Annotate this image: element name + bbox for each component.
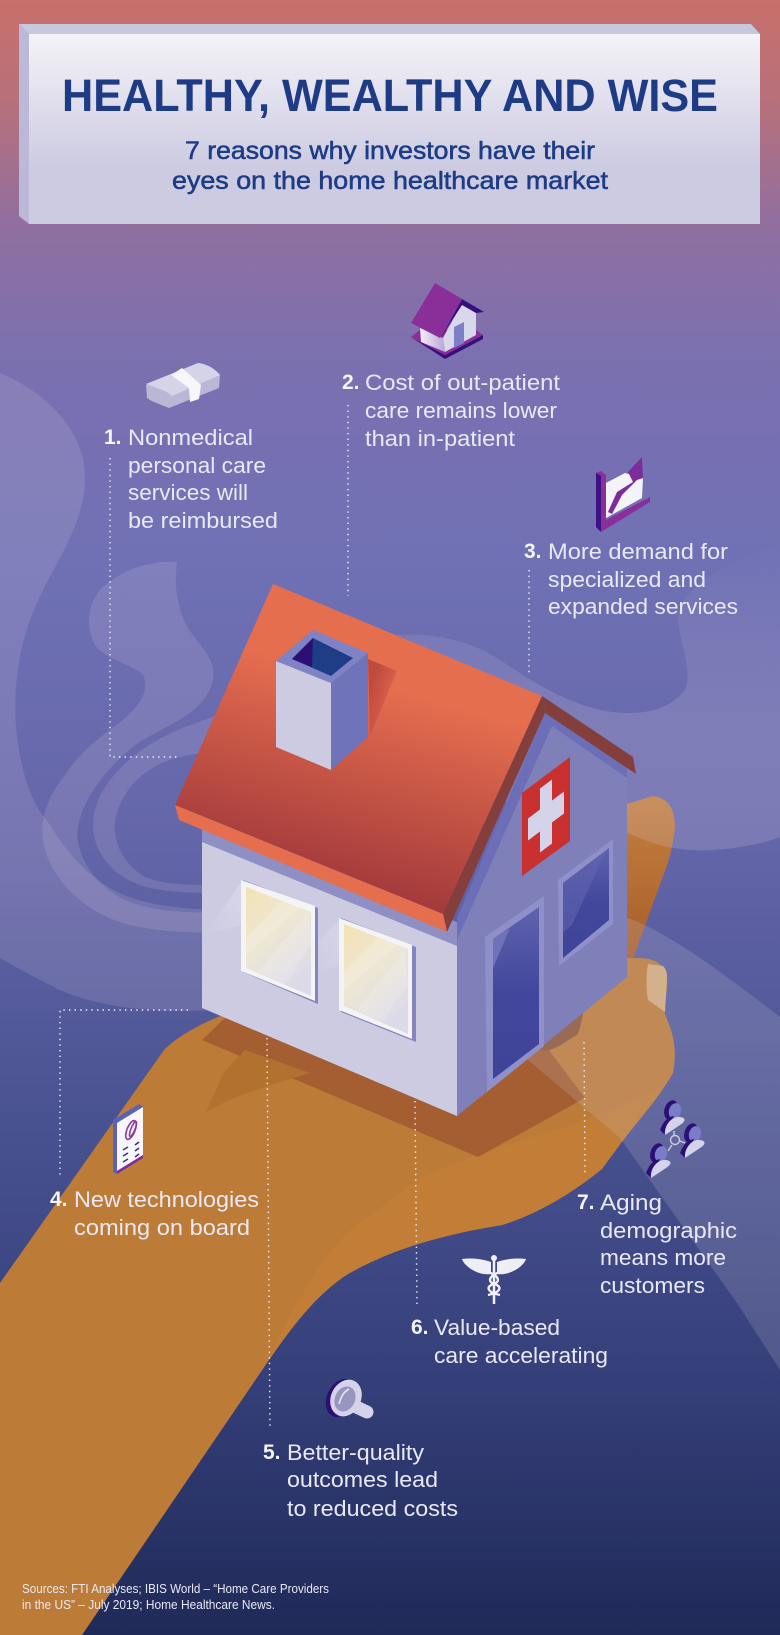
reason 1 text	[104, 425, 278, 533]
sources	[22, 1581, 329, 1612]
icon: people network	[646, 1098, 705, 1178]
reason 4 text: coming on board	[74, 1215, 250, 1240]
reason 7 text	[577, 1190, 737, 1298]
reason 3 text: More demand for	[548, 539, 728, 564]
reason 3 text: specialized and	[548, 567, 706, 592]
hand: upper finger	[600, 796, 675, 960]
header panel	[19, 24, 760, 224]
reason 3 text: 3.	[524, 540, 542, 563]
reason 6 text: 6.	[411, 1316, 429, 1339]
reason 1 text: 1.	[104, 426, 122, 449]
reason 5 text: outcomes lead	[287, 1467, 438, 1492]
reason 2 text	[342, 370, 560, 451]
red cross flag	[522, 757, 570, 876]
faint shadow on palm	[206, 1050, 310, 1112]
side wall gable edge	[457, 713, 627, 940]
subtitle	[172, 137, 608, 195]
reason 2 text: Cost of out-patient	[365, 370, 560, 395]
dotted leader lines	[60, 405, 585, 1430]
reason 7 text: demographic	[600, 1218, 737, 1243]
reason 2 text: 2.	[342, 371, 360, 394]
roof	[175, 584, 542, 914]
reason 5 text: to reduced costs	[287, 1496, 458, 1521]
chimney	[276, 630, 368, 770]
icon: caduceus	[462, 1255, 526, 1304]
hand: dark finger under house	[525, 1000, 583, 1051]
front wall	[202, 837, 457, 1116]
hand: thumb fold tone	[269, 1090, 660, 1360]
hand: palm and thumb	[0, 958, 675, 1635]
subtitle: 7 reasons why investors have their	[185, 137, 595, 165]
reason 3 text: expanded services	[548, 594, 738, 619]
reason 2 text: than in-patient	[365, 426, 515, 451]
reason 5 text: Better-quality	[287, 1440, 424, 1465]
sources: in the US” – July 2019; Home Healthcare News.	[22, 1597, 275, 1612]
reason 6 text: care accelerating	[434, 1343, 608, 1368]
reason 6 text: Value-based	[434, 1315, 560, 1340]
reason 2 text: care remains lower	[365, 398, 557, 423]
title: HEALTHY, WEALTHY AND WISE	[62, 70, 718, 121]
icon: money bundle	[146, 363, 220, 408]
light beams from windows	[205, 882, 241, 935]
reason 7 text: 7.	[577, 1191, 595, 1214]
reason 7 text: customers	[600, 1273, 705, 1298]
icon: growth chart	[596, 457, 650, 532]
gable roof edge	[443, 696, 545, 932]
chimney shadow	[368, 659, 397, 736]
right window	[339, 918, 416, 1042]
side wall	[457, 713, 627, 1116]
icon: phone	[113, 1104, 143, 1174]
overlay waves crossing the hand	[395, 545, 780, 1370]
central house	[175, 584, 636, 1116]
side window	[558, 839, 613, 966]
door	[485, 896, 544, 1092]
sources: Sources: FTI Analyses; IBIS World – “Home Care Providers	[22, 1581, 329, 1596]
reason 4 text	[50, 1187, 259, 1240]
eave shadow band	[202, 825, 457, 946]
reason 7 text: Aging	[600, 1190, 662, 1215]
reason 5 text: 5.	[263, 1441, 281, 1464]
reason 4 text: 4.	[50, 1188, 68, 1211]
reason 1 text: be reimbursed	[128, 508, 278, 533]
roof front lip	[175, 805, 447, 932]
hand: thumbnail	[646, 964, 667, 1012]
reason 1 text: Nonmedical	[128, 425, 253, 450]
reason 7 text: means more	[600, 1245, 726, 1270]
reason 1 text: services will	[128, 480, 248, 505]
reason 6 text	[411, 1315, 608, 1368]
icon: small house	[411, 283, 484, 359]
reason 3 text	[524, 539, 738, 619]
reason 5 text	[263, 1440, 458, 1521]
reason 1 text: personal care	[128, 453, 266, 478]
subtitle: eyes on the home healthcare market	[172, 167, 608, 195]
left window	[241, 880, 318, 1004]
house shadow on hand	[202, 1015, 585, 1157]
icon: magnifier	[320, 1374, 368, 1422]
background smoke waves	[0, 373, 215, 1011]
reason 4 text: New technologies	[74, 1187, 259, 1212]
